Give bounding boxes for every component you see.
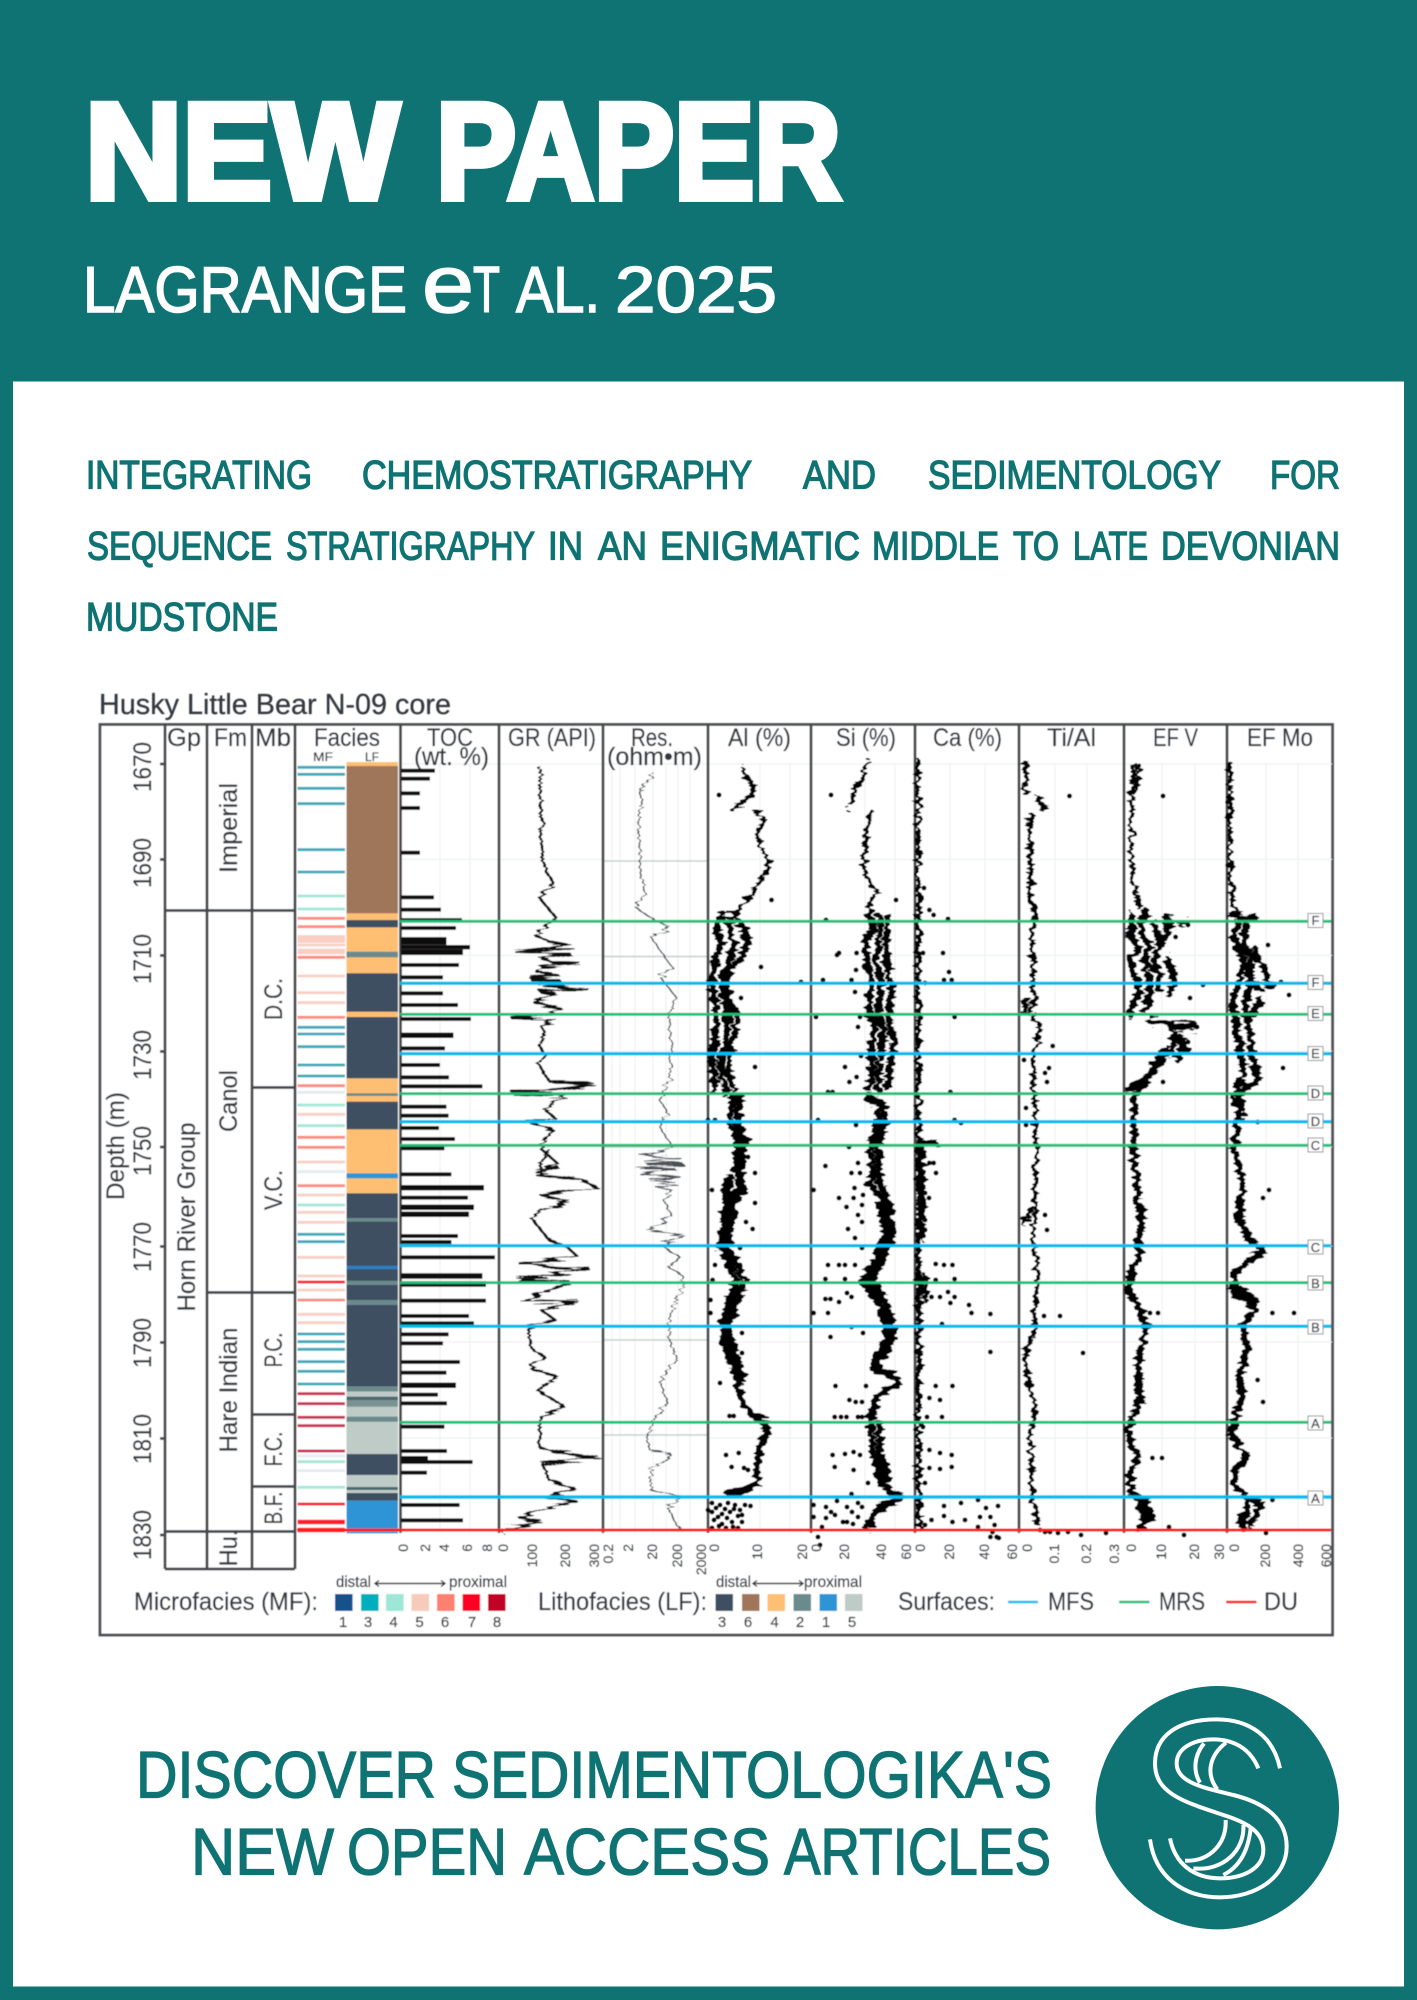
legend: microfacies <box>134 1574 507 1631</box>
x-axis scale numbers: 0 <box>1019 1544 1035 1552</box>
subheading: authors: e <box>422 239 474 330</box>
chart frame <box>100 724 1332 1635</box>
depth axis labels: 1750 <box>129 1126 157 1176</box>
depth axis labels: 1730 <box>129 1030 157 1080</box>
depth axis labels: 1830 <box>129 1510 157 1560</box>
stratigraphic unit labels: F.C. <box>260 1432 288 1466</box>
legend: surfaces: Surfaces: <box>898 1588 995 1616</box>
x-axis scale numbers: 20 <box>644 1544 660 1560</box>
stratigraphic unit labels: Hare Indian <box>215 1328 243 1452</box>
legend: surfaces: MFS <box>1048 1588 1094 1616</box>
legend: microfacies: 8 <box>493 1614 501 1631</box>
article title: SEDIMENTOLOGY <box>928 453 1221 497</box>
stratigraphic unit labels: P.C. <box>260 1332 288 1368</box>
heading: new paper: PAPER <box>436 76 841 228</box>
depth axis labels: 1770 <box>129 1222 157 1272</box>
call to action: NEW <box>191 1816 334 1888</box>
x-axis scale numbers: 40 <box>873 1544 889 1560</box>
legend: lithofacies: 3 <box>718 1614 726 1631</box>
article title: SEQUENCE <box>87 524 272 568</box>
surface letter tags: A <box>1311 1491 1320 1506</box>
column headers: Al (%) <box>728 724 791 752</box>
surface letter tags: E <box>1311 1046 1320 1061</box>
x-axis scale numbers: 0 <box>1123 1544 1139 1552</box>
column headers: (ohm•m) <box>607 743 702 771</box>
x-axis scale numbers: 6 <box>459 1544 475 1552</box>
article title <box>86 453 1340 640</box>
x-axis scale numbers: 8 <box>479 1544 495 1552</box>
surface lines <box>297 921 1331 1530</box>
TOC bar chart <box>401 771 495 1520</box>
call to action: OPEN <box>347 1816 507 1888</box>
x-axis scale numbers: 0 <box>1226 1544 1242 1552</box>
lithofacies column <box>346 762 398 1533</box>
icon: Sedimentologika logo <box>1096 1686 1339 1929</box>
Ca scatter <box>918 762 999 1538</box>
x-axis scale numbers: 0 <box>912 1544 928 1552</box>
x-axis scale numbers: 200 <box>557 1544 573 1567</box>
x-axis scale numbers: 20 <box>941 1544 957 1560</box>
article title: STRATIGRAPHY <box>286 524 535 568</box>
legend: microfacies: 7 <box>468 1614 476 1631</box>
call to action <box>136 1738 1052 1888</box>
x-axis scale numbers: 60 <box>1004 1544 1020 1560</box>
x-axis scale numbers: 60 <box>898 1544 914 1560</box>
stratigraphic core chart <box>99 689 1334 1635</box>
article title: DEVONIAN <box>1161 524 1340 568</box>
chart title: Husky Little Bear N-09 core <box>99 689 451 721</box>
x-axis scale numbers: 10 <box>749 1544 765 1560</box>
legend: microfacies: 3 <box>364 1614 372 1631</box>
depth axis labels <box>102 742 157 1560</box>
legend: surfaces: MRS <box>1159 1588 1205 1616</box>
column headers: EF Mo <box>1247 724 1313 752</box>
call to action: DISCOVER <box>136 1738 436 1812</box>
stratigraphic unit labels: V.C. <box>260 1170 288 1210</box>
surface letter tags: B <box>1311 1276 1320 1291</box>
x-axis scale numbers: 0.2 <box>600 1544 616 1563</box>
x-axis scale numbers: 20 <box>836 1544 852 1560</box>
legend: microfacies: proximal <box>449 1574 507 1591</box>
call to action: SEDIMENTOLOGIKA'S <box>452 1738 1052 1812</box>
column headers: Si (%) <box>836 724 896 752</box>
article title: AN <box>598 524 647 568</box>
article title: CHEMOSTRATIGRAPHY <box>362 453 752 497</box>
x-axis scale numbers: 2000 <box>693 1544 709 1575</box>
column headers: (wt. %) <box>414 743 489 771</box>
heading: new paper: NEW <box>85 76 400 228</box>
stratigraphic unit labels: Canol <box>215 1070 243 1132</box>
x-axis scale numbers: 40 <box>976 1544 992 1560</box>
faint grid <box>400 764 1332 1533</box>
article title: TO <box>1013 524 1059 568</box>
column headers <box>167 724 1313 771</box>
legend: lithofacies: 2 <box>796 1614 804 1631</box>
surface letter tags: D <box>1311 1114 1320 1129</box>
column headers: EF V <box>1153 724 1198 752</box>
Al scatter <box>708 767 801 1528</box>
article title: AND <box>803 453 876 497</box>
stratigraphic unit labels: Hu. <box>215 1530 243 1566</box>
x-axis scale numbers: 0.1 <box>1046 1544 1062 1563</box>
surface letter tags: F <box>1312 975 1320 990</box>
legend: surfaces <box>898 1588 1298 1616</box>
legend: lithofacies: 5 <box>848 1614 856 1631</box>
article title: LATE <box>1073 524 1148 568</box>
article title: INTEGRATING <box>86 453 312 497</box>
x-axis scale numbers: 10 <box>1153 1544 1169 1560</box>
stratigraphic unit labels: D.C. <box>260 978 288 1020</box>
article title: MIDDLE <box>872 524 999 568</box>
subheading: authors: AL. <box>516 253 600 326</box>
column headers: LF <box>365 750 379 764</box>
subheading: authors: 2025 <box>615 253 777 326</box>
x-axis scale numbers: 20 <box>1186 1544 1202 1560</box>
subheading: authors <box>83 239 777 330</box>
x-axis scale numbers: 100 <box>524 1544 540 1567</box>
x-axis scale numbers: 30 <box>1211 1544 1227 1560</box>
depth axis labels: 1690 <box>129 838 157 888</box>
x-axis scale numbers: 200 <box>1257 1544 1273 1567</box>
article title: MUDSTONE <box>86 596 278 640</box>
column headers: GR (API) <box>508 724 596 752</box>
x-axis scale numbers: 4 <box>436 1544 452 1552</box>
column headers: Ti/Al <box>1047 724 1096 752</box>
x-axis scale numbers: 0 <box>808 1544 824 1552</box>
x-axis scale numbers: 0 <box>706 1544 722 1552</box>
column headers: Gp <box>167 724 201 752</box>
article title: ENIGMATIC <box>660 524 860 568</box>
resistivity log curve <box>635 773 684 1530</box>
surface letter tags: C <box>1311 1240 1320 1255</box>
surface letter tags <box>1308 913 1323 1506</box>
x-axis scale numbers: 0.3 <box>1106 1544 1122 1563</box>
GR log curve <box>502 767 600 1533</box>
geochemistry scatter plots <box>708 762 1294 1545</box>
column headers: Fm <box>214 724 247 752</box>
surface letter tags: E <box>1311 1006 1320 1021</box>
x-axis scale numbers: 200 <box>669 1544 685 1567</box>
article title: IN <box>548 524 583 568</box>
depth axis labels: 1810 <box>129 1414 157 1464</box>
call to action: ARTICLES <box>784 1816 1051 1888</box>
stratigraphic unit labels: Imperial <box>215 783 243 873</box>
x-axis scale numbers: 400 <box>1290 1544 1306 1567</box>
column headers: Facies <box>314 724 380 752</box>
legend: microfacies: 5 <box>415 1614 424 1631</box>
depth axis labels: 1670 <box>129 742 157 792</box>
column headers: Mb <box>255 724 291 752</box>
surface letter tags: B <box>1311 1320 1320 1335</box>
white content panel <box>13 382 1404 1986</box>
x-axis scale numbers: 600 <box>1318 1544 1334 1567</box>
surface letter tags: F <box>1312 913 1320 928</box>
article title: FOR <box>1270 453 1340 497</box>
Ti/Al scatter <box>1024 762 1106 1535</box>
depth axis labels: Depth (m) <box>102 1092 130 1200</box>
depth axis labels: 1790 <box>129 1318 157 1368</box>
legend: lithofacies: Lithofacies (LF): <box>538 1588 707 1616</box>
subheading: authors: LAGRANGE <box>83 253 407 326</box>
x-axis scale numbers: 2 <box>417 1544 433 1552</box>
legend: microfacies: 4 <box>389 1614 398 1631</box>
surface letter tags: C <box>1311 1138 1320 1153</box>
column headers: TOC <box>427 724 473 752</box>
subheading: authors: T <box>473 253 500 326</box>
legend: lithofacies <box>538 1574 862 1631</box>
column dividers <box>165 724 1227 1569</box>
legend: lithofacies: distal <box>716 1574 751 1591</box>
x-axis scale numbers: 20 <box>794 1544 810 1560</box>
call to action: ACCESS <box>524 1816 770 1888</box>
x-axis scale numbers: 0.2 <box>1078 1544 1094 1563</box>
heading: new paper <box>85 76 841 228</box>
legend: lithofacies: proximal <box>804 1574 862 1591</box>
x-axis scale numbers <box>395 1544 1334 1575</box>
legend: microfacies: 1 <box>339 1614 347 1631</box>
depth axis labels: 1710 <box>129 934 157 984</box>
stratigraphic unit labels: B.F. <box>260 1492 288 1524</box>
EF V scatter <box>1127 766 1203 1535</box>
x-axis scale numbers: 0 <box>495 1544 511 1552</box>
legend: microfacies: Microfacies (MF): <box>134 1588 318 1616</box>
legend: microfacies: distal <box>336 1574 371 1591</box>
x-axis scale numbers: 300 <box>586 1544 602 1567</box>
Si scatter <box>814 762 902 1545</box>
surface letter tags: D <box>1311 1086 1320 1101</box>
x-axis scale numbers: 2 <box>620 1544 636 1552</box>
column headers: Ca (%) <box>933 724 1002 752</box>
legend: surfaces: DU <box>1264 1588 1298 1616</box>
depth ticks <box>160 764 165 1535</box>
stratigraphic unit labels: Horn River Group <box>173 1122 201 1312</box>
microfacies column <box>298 767 345 1530</box>
legend: lithofacies: 6 <box>744 1614 752 1631</box>
legend: lithofacies: 4 <box>770 1614 779 1631</box>
column headers: Res. <box>631 724 673 752</box>
column headers: MF <box>313 750 333 764</box>
stratigraphic unit labels <box>173 783 288 1566</box>
surface letter tags: A <box>1311 1416 1320 1431</box>
legend: microfacies: 6 <box>441 1614 449 1631</box>
legend: lithofacies: 1 <box>822 1614 830 1631</box>
EF Mo scatter <box>1230 764 1294 1533</box>
x-axis scale numbers: 0 <box>395 1544 411 1552</box>
